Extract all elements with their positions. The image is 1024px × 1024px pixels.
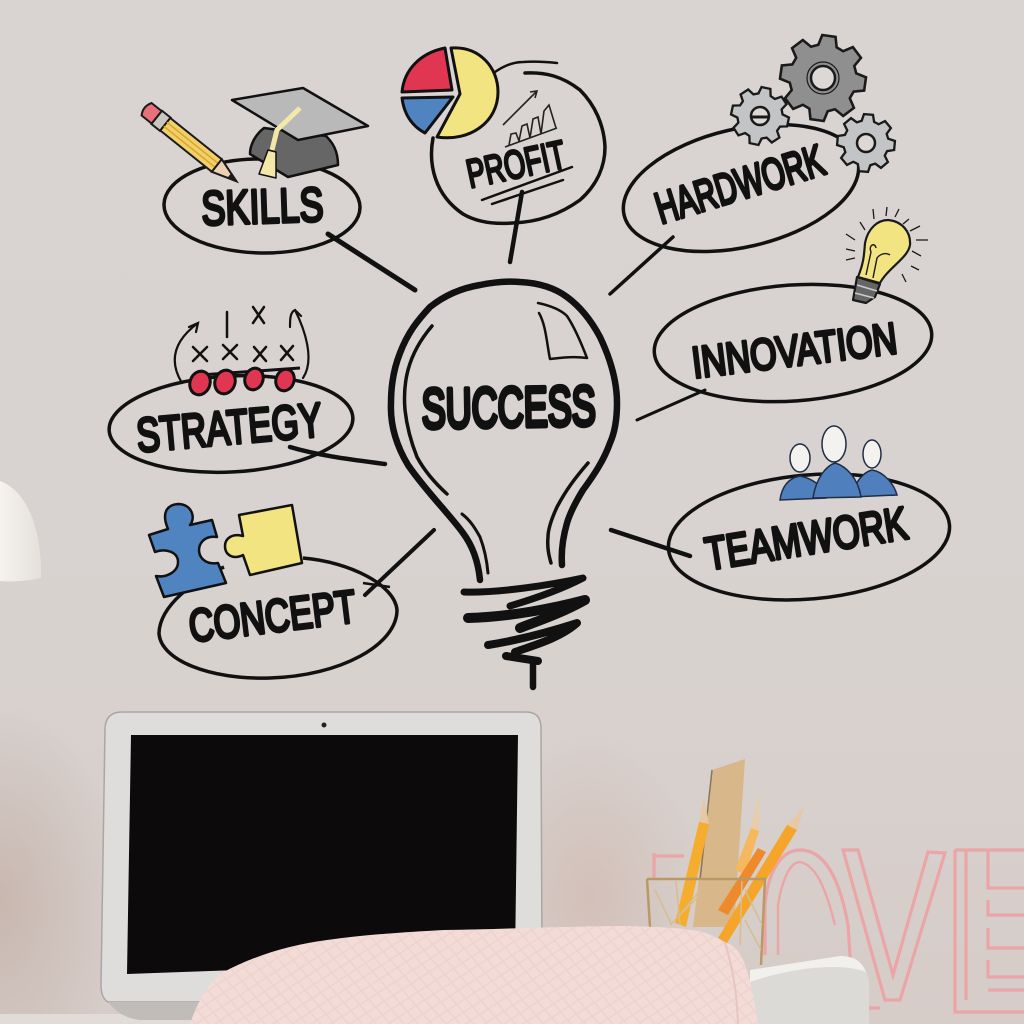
icon: playbook [175,307,308,398]
label: strategy: STRATEGY [134,394,324,463]
panel: strategy [107,307,385,478]
white mug [750,956,869,1024]
icon: small light bulb [846,207,928,303]
label: concept: CONCEPT [186,580,359,652]
panel: concept [149,504,434,678]
pink wire letters [654,850,1024,1012]
label: skills: SKILLS [201,179,324,236]
panel: profit [402,48,605,262]
icon: pie chart [402,48,498,138]
pink knit blanket [190,926,758,1024]
heading: success: SUCCESS [421,374,596,440]
icon: bar chart [503,91,557,147]
lamp at left edge [0,481,41,581]
label: profit: PROFIT [463,133,570,197]
desk surface [0,1014,230,1024]
icon: graduation cap [232,88,368,178]
panel: hardwork [610,30,897,294]
icon: puzzle pieces [149,504,302,597]
panel: innovation [637,207,936,420]
icon: team of people [780,426,897,500]
desk items: pencil holder and ruler [647,759,804,965]
label: hardwork: HARDWORK [650,136,830,234]
panel: teamwork [611,426,955,611]
label: teamwork: TEAMWORK [701,497,911,580]
icon: gears [726,30,897,174]
icon: pencil [139,101,242,188]
label: innovation: INNOVATION [689,314,900,388]
central light bulb [391,282,617,687]
laptop [101,712,542,1020]
panel: skills [139,88,415,290]
